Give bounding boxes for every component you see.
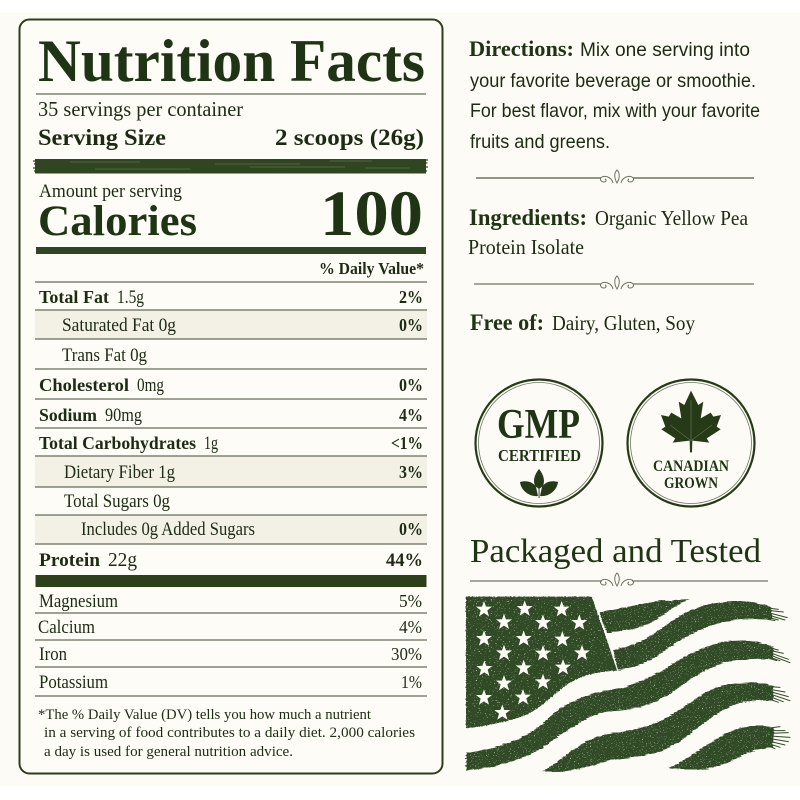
stripe brush ends xyxy=(465,608,790,769)
ingredients text: Organic Yellow Pea xyxy=(595,206,748,230)
row: total carbohydrates xyxy=(39,433,423,454)
row: saturated fat: 0% xyxy=(399,315,423,335)
row: protein: 44% xyxy=(386,550,423,571)
footnote xyxy=(38,707,415,760)
free of text: Dairy, Gluten, Soy xyxy=(552,311,695,335)
row: total carbohydrates: Total Carbohydrates xyxy=(39,433,196,453)
badge: Canadian grown: CANADIAN xyxy=(653,458,729,475)
icon: maple leaf xyxy=(661,391,721,452)
ornamental divider 1 xyxy=(476,170,754,183)
row: total carbohydrates: <1% xyxy=(391,433,423,453)
row: total fat xyxy=(39,287,423,308)
amount per serving: Amount per serving xyxy=(39,181,182,202)
ingredients text: Protein Isolate xyxy=(468,235,584,259)
daily value heading: % Daily Value* xyxy=(319,259,424,278)
row: iron: 30% xyxy=(391,644,422,664)
row: magnesium: 5% xyxy=(399,591,422,611)
shaded rows xyxy=(35,310,427,544)
row: saturated fat: Saturated Fat 0g xyxy=(62,315,176,336)
thick brushed bar xyxy=(33,159,428,174)
ornamental divider 2 xyxy=(474,276,754,289)
directions text xyxy=(469,36,760,153)
row: saturated fat xyxy=(62,315,423,336)
row: potassium: Potassium xyxy=(39,673,109,693)
flag canton xyxy=(466,597,618,728)
row: sodium: 90mg xyxy=(105,405,142,426)
row: iron xyxy=(39,644,422,665)
calories value: 100 xyxy=(320,178,423,250)
row: sodium: Sodium xyxy=(39,405,97,425)
row: cholesterol: 0% xyxy=(399,375,423,395)
canton edge line xyxy=(599,613,618,671)
row: added sugars: 0% xyxy=(399,519,423,539)
badge: GMP certified: CERTIFIED xyxy=(498,446,581,465)
directions text: fruits and greens. xyxy=(470,131,610,153)
row: dietary fiber xyxy=(64,462,423,483)
footnote: in a serving of food contributes to a daily diet. 2,000 calories xyxy=(44,725,415,741)
free of text xyxy=(470,310,695,335)
medium bar xyxy=(36,247,426,254)
panel border xyxy=(20,20,442,774)
free of text: Free of: xyxy=(470,310,544,335)
badge: Canadian grown xyxy=(628,380,754,506)
badge: Canadian grown: GROWN xyxy=(664,475,718,492)
badge: GMP certified xyxy=(476,380,602,506)
serving size: 2 scoops (26g) xyxy=(275,125,424,151)
flag stripes xyxy=(467,599,773,772)
row: protein: Protein xyxy=(39,550,100,571)
row: protein: 22g xyxy=(108,549,137,571)
ornamental divider 3 xyxy=(470,573,768,586)
row: total fat: 2% xyxy=(399,287,423,307)
row: calcium xyxy=(38,617,422,638)
ingredients text: Ingredients: xyxy=(469,205,587,230)
serving size xyxy=(38,125,424,151)
flag stars xyxy=(476,600,590,720)
row: protein xyxy=(39,549,423,571)
calories label: Calories xyxy=(38,198,197,245)
row: trans fat: Trans Fat 0g xyxy=(62,345,147,366)
row: sodium: 4% xyxy=(399,405,423,425)
row: potassium xyxy=(39,672,422,693)
row: dietary fiber: Dietary Fiber 1g xyxy=(64,462,175,483)
row: sodium xyxy=(39,405,423,426)
directions text: For best flavor, mix with your favorite xyxy=(470,100,760,122)
ingredients text xyxy=(468,205,748,259)
row: total fat: Total Fat xyxy=(39,287,109,307)
directions text: Directions: xyxy=(469,36,574,61)
row: dietary fiber: 3% xyxy=(399,462,423,482)
row: magnesium: Magnesium xyxy=(39,592,119,612)
icon: waving flag xyxy=(465,597,790,772)
directions text: Mix one serving into xyxy=(580,39,750,61)
row: cholesterol: 0mg xyxy=(137,375,164,396)
row: calcium: Calcium xyxy=(38,618,96,638)
serving size: Serving Size xyxy=(38,125,166,151)
row: magnesium xyxy=(39,591,422,612)
row: cholesterol: Cholesterol xyxy=(39,375,129,395)
row: added sugars: Includes 0g Added Sugars xyxy=(81,519,255,540)
servings per container: 35 servings per container xyxy=(38,97,243,121)
row: potassium: 1% xyxy=(401,672,422,692)
panel: nutrition facts xyxy=(20,20,442,774)
icon: leaves xyxy=(520,469,558,498)
row: calcium: 4% xyxy=(399,617,422,637)
footnote: *The % Daily Value (DV) tells you how much a nutrient xyxy=(38,707,371,723)
row: cholesterol xyxy=(39,375,423,396)
directions text: your favorite beverage or smoothie. xyxy=(470,70,756,92)
protein bar xyxy=(36,575,426,587)
heading: packaged and tested: Packaged and Tested xyxy=(470,533,761,570)
badge: GMP certified: GMP xyxy=(497,402,580,448)
row: iron: Iron xyxy=(39,645,67,665)
row: total carbohydrates: 1g xyxy=(204,433,218,454)
title: Nutrition Facts xyxy=(38,28,425,94)
row: total fat: 1.5g xyxy=(117,287,144,308)
footnote: a day is used for general nutrition advice. xyxy=(44,744,293,760)
row: total sugars: Total Sugars 0g xyxy=(64,491,170,512)
row: added sugars xyxy=(81,519,423,540)
